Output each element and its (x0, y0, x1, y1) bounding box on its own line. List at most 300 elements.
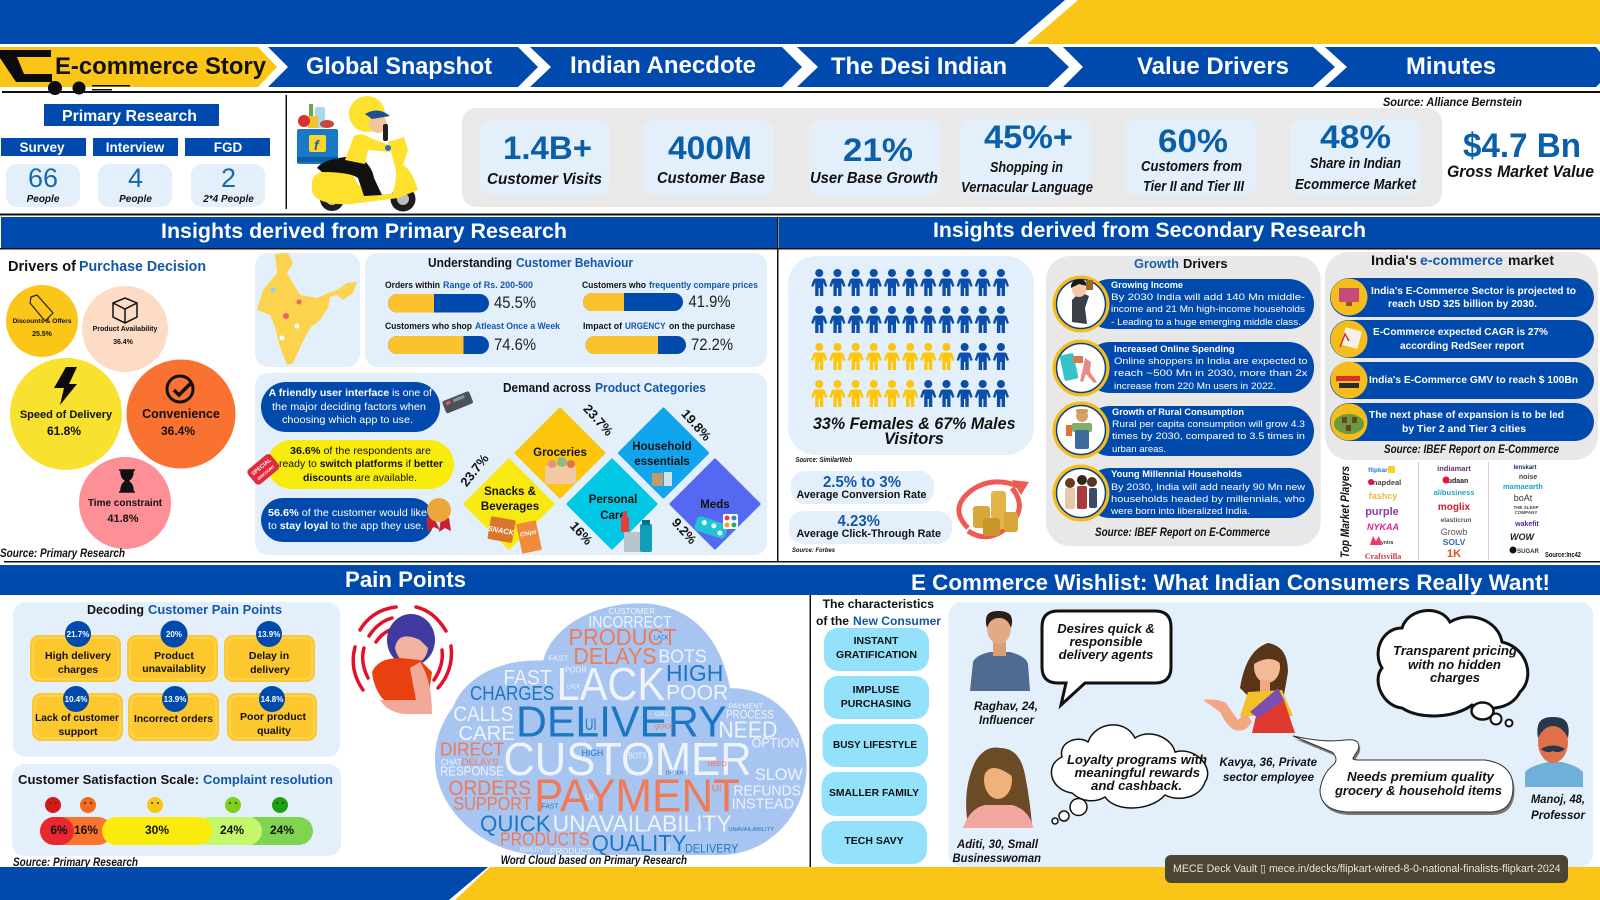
callout: switch platforms: DISCOUNT (256, 463, 276, 481)
pain: poor product quality (227, 686, 317, 741)
metric: vernacular language: Shopping in (990, 159, 1063, 176)
nav: E-commerce Story: E-commerce Story (55, 53, 267, 80)
trait: instant gratification: GRATIFICATION (836, 649, 917, 661)
stacked satisfaction bar: 16% (74, 823, 98, 837)
navigation: chevrons (0, 47, 1600, 95)
driver: millennial households: were born into liberalized India. (1110, 506, 1250, 517)
stat: FGD: FGD (214, 140, 242, 155)
trait: smaller family: SMALLER FAMILY (829, 787, 919, 799)
metric: market share: 48% (1320, 119, 1391, 155)
logos column 2: indiamart (1437, 464, 1471, 473)
logos column 2 (1434, 464, 1474, 560)
word cloud: QUICK (654, 724, 673, 730)
panel: consumer personas (948, 602, 1593, 867)
metric: customer visits: 1.4B+ (503, 130, 592, 166)
panel: growth drivers (1046, 256, 1321, 546)
bubble: convenience: 36.4% (161, 424, 195, 438)
label: top market players: Top Market Players (1340, 466, 1352, 558)
logos column 2: elasticrun (1441, 517, 1471, 524)
word cloud: RESPONSE (440, 764, 504, 779)
thought bubble: Kavya: Transparent pricing (1393, 643, 1517, 658)
callout: friendly user interface: choosing which app to use. (282, 414, 413, 426)
metric: shop once a week: 74.6% (494, 335, 536, 354)
trait: smaller family (822, 772, 927, 816)
stat: Interview: 4 (128, 163, 143, 193)
category: groceries: Groceries (533, 447, 587, 459)
heading: product categories: Demand across (503, 381, 591, 395)
trait: impluse purchasing: PURCHASING (841, 698, 911, 710)
heading: Primary Research: Primary Research (62, 108, 197, 125)
logos column 2: 1K (1447, 548, 1461, 560)
fact: USD 325 billion (1330, 278, 1594, 317)
fact: GMV: India's E-Commerce GMV to reach $ 100Bn (1369, 375, 1578, 386)
source: primary research: Source: Primary Research (0, 548, 125, 560)
thought bubble: Kavya: charges (1430, 670, 1480, 685)
category: snacks and beverages: Beverages (481, 501, 539, 513)
word cloud: QUICK (480, 811, 551, 837)
metric: orders within range (385, 280, 536, 312)
heading: customer behaviour: Understanding (428, 256, 512, 270)
fact: USD 325 billion: reach USD 325 billion by 2030. (1388, 299, 1537, 310)
driver: growing income: By 2030 India will add 140 Mn middle- (1111, 292, 1305, 303)
metric: customer base: Customer Base (657, 170, 765, 187)
driver: growing income: - Leading to a huge emerging middle class. (1111, 317, 1301, 328)
nav: Value Drivers (1063, 47, 1335, 87)
panel: India's e-commerce market (1325, 252, 1598, 460)
bottom banner (0, 867, 1600, 900)
stat: Survey: People (27, 194, 60, 205)
word cloud: NEED (707, 759, 727, 768)
caption: females and males: 33% Females & 67% Males (813, 414, 1016, 433)
nav: The Desi Indian (797, 47, 1069, 87)
nav: E-commerce Story (0, 47, 277, 87)
metric: tier II and III: Customers from (1141, 158, 1242, 175)
persona: Kavya: sector employee (1223, 770, 1314, 784)
bubble: product availability (82, 286, 168, 372)
bubble: time constraint: 41.8% (107, 513, 139, 525)
stat: click-through rate: Average Click-Through Rate (796, 528, 941, 540)
heading: e-commerce market: e-commerce (1420, 252, 1503, 268)
speech bubble: Raghav: responsible (1070, 634, 1142, 649)
stat: Survey: 66 (28, 163, 58, 193)
metric: gross market value: Gross Market Value (1447, 163, 1594, 181)
persona: Raghav: Influencer (979, 713, 1035, 727)
logos column 3: COMPANY (1515, 510, 1537, 515)
stat: Interview (93, 138, 178, 207)
metric: urgency: on the purchase (669, 321, 735, 331)
driver: millennial households (1052, 464, 1314, 522)
fact: Tier 2 and 3: by Tier 2 and Tier 3 cities (1402, 424, 1526, 435)
callout: switch platforms: 36.6% of the respondents are (290, 445, 431, 457)
stat: click-through rate (789, 511, 952, 544)
heading: pain points: Customer Pain Points (148, 603, 282, 617)
logos column 2: udaan (1448, 478, 1468, 485)
word cloud: FAST (542, 801, 559, 810)
bubble: time constraint (79, 457, 171, 549)
source: IBEF: Source: IBEF Report on E-Commerce (1095, 527, 1271, 539)
speech bubble: Manoj: grocery & household items (1334, 783, 1502, 798)
word cloud: LACK (654, 635, 668, 641)
nav: Minutes (1325, 47, 1600, 87)
heading: satisfaction scale (18, 772, 333, 787)
icon: delivery rider on scooter (297, 96, 418, 212)
metric: shop once a week: Atleast Once a Week (475, 321, 561, 331)
driver: rural consumption: Growth of Rural Consumption (1112, 407, 1244, 418)
panel: decoding customer pain points (13, 602, 340, 757)
thought bubble: Aditi: Loyalty programs with (1067, 752, 1207, 767)
word cloud: POOR (565, 664, 587, 674)
persona: Kavya: Kavya, 36, Private (1220, 755, 1317, 769)
bubble: convenience: Convenience (142, 407, 220, 421)
persona: Raghav (970, 611, 1038, 727)
word cloud: HIGH (666, 660, 723, 686)
callout: friendly user interface: A friendly user interface is one of (269, 387, 432, 399)
panel: findings and product categories (246, 373, 767, 555)
bubble: speed of delivery: 61.8% (47, 424, 81, 438)
category: personal care: Personal (589, 494, 637, 506)
logos column 3: noise (1519, 474, 1537, 481)
heading: e-commerce market: India's (1371, 252, 1417, 268)
stacked satisfaction bar: 6% (50, 823, 68, 837)
trait: busy lifestyle: BUSY LIFESTYLE (833, 739, 917, 751)
word cloud (435, 603, 807, 856)
heading: new consumer: New Consumer (853, 614, 941, 628)
stacked satisfaction bar (40, 817, 313, 845)
source: Alliance Bernstein: Source: Alliance Bernstein (1383, 95, 1522, 109)
fact: Tier 2 and 3: The next phase of expansion is to be led (1369, 410, 1564, 421)
percent labels: 19.8% (678, 406, 715, 444)
driver: online spending: increase from 220 Mn users in 2022. (1114, 381, 1276, 392)
stat: click-through rate: 4.23% (838, 513, 880, 530)
watermark (1165, 855, 1568, 883)
bubble: discounts and offers (6, 285, 78, 357)
panel: drivers of purchase decision (0, 258, 236, 560)
nav: Minutes: Minutes (1406, 53, 1496, 80)
pain: delay in delivery: Delay in (249, 650, 289, 662)
logos column 1: snapdeal (1369, 478, 1401, 487)
heading: e-commerce market (1371, 252, 1554, 268)
speech bubble: Raghav (1042, 611, 1171, 705)
word cloud: PRODUCT (550, 847, 592, 856)
metric: customer visits (479, 120, 610, 195)
heading: e-commerce market: market (1508, 252, 1554, 268)
logos column 1: NYKAA (1367, 522, 1399, 532)
persona: Manoj (1525, 717, 1586, 822)
word cloud: BOTS (658, 646, 707, 667)
pain: lack of customer support (32, 686, 123, 741)
driver: growing income: income and 21 Mn high-income households (1111, 304, 1305, 315)
pictogram row 4 (811, 380, 1009, 407)
metric: market share: Share in Indian (1310, 155, 1401, 172)
word cloud: DELIVERY (516, 698, 727, 747)
bubble: speed of delivery: Speed of Delivery (20, 409, 113, 421)
metric: tier II and III: Tier II and Tier III (1143, 178, 1245, 195)
word cloud: FAST (503, 664, 552, 689)
callout: switch platforms: discounts are available. (303, 472, 417, 484)
caption: word cloud: Word Cloud based on Primary Research (501, 855, 687, 867)
panel: understanding customer behaviour (365, 253, 767, 367)
metric: urgency: URGENCY (625, 321, 666, 331)
word cloud: LACK (557, 658, 665, 710)
metric: shop once a week (385, 321, 561, 354)
persona: Aditi: Businesswoman (952, 851, 1041, 865)
metric: user base growth: User Base Growth (810, 170, 938, 187)
fact: Tier 2 and 3 (1330, 403, 1594, 441)
logos column 3: mamaearth (1503, 482, 1543, 491)
pain: high delivery charges: charges (58, 664, 98, 676)
metric: customer base: 400M (668, 130, 752, 166)
logos column 3: boAt (1514, 493, 1533, 503)
stat: Survey: Survey (19, 140, 65, 155)
logos column 1 (1365, 466, 1401, 561)
nav: Indian Anecdote: Indian Anecdote (570, 52, 756, 79)
stat: FGD: 2 (221, 163, 236, 193)
fact: CAGR: E-Commerce expected CAGR is 27% (1373, 327, 1548, 338)
heading: Insights derived from Primary Research: Insights derived from Primary Research (161, 219, 567, 243)
speech bubble: Raghav: delivery agents (1059, 647, 1153, 662)
word cloud: CALLS (655, 712, 673, 718)
bubble: speed of delivery (10, 358, 122, 470)
persona: Kavya (1203, 643, 1317, 784)
persona: Aditi: Aditi, 30, Small (956, 837, 1039, 851)
callout: stay loyal: 56.6% of the customer would like (268, 507, 427, 519)
logos column 3: lenskart (1513, 465, 1537, 471)
trait: impluse purchasing (824, 676, 929, 719)
icon: cart (0, 50, 130, 95)
source: Inc42: Source:Inc42 (1545, 552, 1581, 559)
callout: switch platforms: SPECIAL (251, 457, 273, 477)
category: snacks and beverages: Snacks & (484, 486, 536, 498)
metric: user base growth: 21% (843, 132, 913, 168)
logos column 3: wakefit (1514, 521, 1540, 528)
icon: delivery rider on scooter: f (314, 137, 320, 153)
driver: rural consumption (1052, 402, 1314, 458)
word cloud: CUSTOMER (503, 733, 752, 785)
heading: product categories: Product Categories (595, 381, 706, 395)
word cloud: REFUNDS (733, 783, 801, 800)
word cloud: LACK (567, 683, 580, 690)
pain: delay in delivery (224, 621, 315, 682)
fact: GMV (1330, 362, 1594, 399)
heading: Insights derived from Secondary Research (779, 217, 1600, 248)
nav: Global Snapshot: Global Snapshot (306, 53, 492, 80)
word cloud: UI (585, 793, 593, 802)
callout: stay loyal: to stay loyal to the app they use. (268, 520, 424, 532)
heading: pain points: Decoding (87, 603, 144, 617)
heading: new consumer: of the (816, 614, 849, 628)
category: household essentials: Household (632, 441, 692, 453)
metric: orders within range: Range of Rs. 200-500 (443, 280, 533, 290)
pictogram row 1 (811, 269, 1009, 296)
pictogram row 3 (811, 343, 1009, 370)
pain: delay in delivery: 13.9% (258, 630, 280, 639)
source: Forbes: Source: Forbes (792, 547, 835, 554)
pain: poor product quality: 14.8% (261, 695, 283, 704)
bubble: discounts and offers: Discounts & Offers (13, 318, 72, 325)
metric: urgency (583, 321, 735, 354)
word cloud: DIRECT (440, 739, 504, 760)
word cloud: PAYMENT (728, 701, 764, 710)
stat: FGD: 2*4 People (202, 194, 254, 205)
trait: busy lifestyle (823, 724, 928, 767)
metric: compare prices: Customers who (582, 280, 646, 290)
heading: growth drivers (1134, 256, 1228, 271)
nav: The Desi Indian: The Desi Indian (831, 53, 1007, 80)
metric: tier II and III: 60% (1158, 123, 1228, 159)
metric: gross market value (1447, 127, 1594, 181)
callout: friendly user interface: the major deciding factors when (272, 401, 426, 413)
logos column 2: moglix (1438, 502, 1471, 513)
icon: stressed woman (353, 607, 451, 714)
persona: Raghav: Raghav, 24, (974, 699, 1038, 713)
logos column 1: purple (1365, 506, 1399, 518)
metric: compare prices (582, 280, 758, 311)
pain: high delivery charges: High delivery (45, 650, 111, 662)
metric: vernacular language (960, 119, 1093, 196)
percent labels: 9.2% (669, 515, 700, 547)
word cloud: CALLS (453, 701, 513, 726)
word cloud: OPTION (752, 735, 799, 751)
callout: friendly user interface (261, 382, 474, 432)
speech bubble: Manoj (1293, 736, 1514, 815)
logos column 3: SUGAR (1517, 549, 1539, 555)
word cloud: QUALITY (592, 830, 687, 856)
panel: new consumer characteristics (816, 597, 941, 864)
word cloud: SLOW (755, 765, 803, 784)
word cloud: PRODUCT (568, 624, 677, 650)
word cloud: QUALITY (520, 848, 544, 854)
metric: market share: Ecommerce Market (1295, 176, 1417, 193)
word cloud: CARE (458, 723, 515, 745)
word cloud: INCORRECT (588, 612, 672, 631)
trait: instant gratification (824, 628, 929, 671)
source: SimilarWeb: Source: SimilarWeb (796, 457, 853, 464)
stat: FGD (185, 138, 270, 207)
word cloud: CUSTOMER (608, 606, 655, 616)
pain: incorrect orders: Incorrect orders (134, 713, 213, 725)
stat: Survey (1, 138, 86, 207)
fact: USD 325 billion: India's E-Commerce Sector is projected to (1371, 286, 1576, 297)
thought bubble: Kavya (1378, 611, 1528, 726)
caption: females and males: Visitors (884, 429, 944, 448)
source: primary research: Source: Primary Research (13, 857, 138, 869)
category: snacks and beverages: SNACK (487, 524, 515, 537)
bubble: product availability: Product Availability (93, 326, 158, 333)
driver: millennial households: Young Millennial Households (1111, 469, 1242, 480)
stacked satisfaction bar: 24% (270, 823, 294, 837)
panel: primary research summary (1, 104, 270, 207)
stat: Interview: Interview (106, 140, 165, 155)
trait: instant gratification: INSTANT (854, 635, 899, 647)
panel: customer satisfaction scale (12, 764, 341, 856)
watermark: MECE Deck Vault ▯ mece.in/decks/flipkart-wired-8-0-national-finalists-flipkart-2024 (1173, 863, 1561, 875)
heading band: Pain Points and Wishlist (0, 565, 1600, 595)
percent labels: 23.7% (580, 401, 617, 439)
pain: product unavailability (127, 620, 218, 682)
logos column 3: WOW (1510, 532, 1535, 542)
heading: pain points (87, 603, 282, 617)
metric: compare prices: frequently compare prices (649, 280, 758, 290)
heading: Insights derived from Secondary Research: Insights derived from Secondary Research (933, 218, 1366, 242)
driver: online spending: Increased Online Spending (1114, 344, 1235, 355)
driver: online spending: Online shoppers in India are expected to (1114, 356, 1308, 367)
driver: rural consumption: times by 2030, compared to 3.5 times in (1112, 431, 1305, 442)
word cloud: ORDERS (448, 775, 531, 800)
logos column 3 (1503, 465, 1543, 555)
metric: customer base (643, 120, 774, 195)
driver: millennial households: households headed by millennials, who (1111, 494, 1305, 505)
heading: drivers (8, 258, 206, 275)
pain: lack of customer support: 10.4% (65, 695, 87, 704)
metric: user base growth (809, 120, 940, 196)
nav: Global Snapshot (268, 47, 538, 87)
stat: conversion rate (791, 471, 934, 504)
source: IBEF report: Source: IBEF Report on E-Commerce (1384, 444, 1560, 456)
word cloud: INSTEAD (732, 795, 794, 812)
callout: switch platforms: ready to switch platforms if better (279, 458, 443, 470)
metric: shop once a week: Customers who shop (385, 321, 472, 331)
persona: Manoj: Manoj, 48, (1531, 792, 1585, 806)
metric: vernacular language: 45%+ (984, 119, 1073, 155)
word cloud: FAST (548, 654, 569, 663)
speech bubble: Raghav: Desires quick & (1057, 621, 1155, 636)
heading: new consumer: The characteristics (823, 597, 934, 611)
word cloud: NEED (718, 716, 777, 742)
word cloud: POOR (666, 679, 728, 704)
category: personal care (568, 460, 656, 552)
heading: Insights derived from Primary Research (1, 217, 777, 248)
nav: Indian Anecdote (530, 47, 802, 87)
logos column 3: THE SLEEP (1513, 505, 1539, 510)
word cloud: UI (712, 784, 722, 795)
word cloud: SUPPORT (453, 793, 532, 814)
heading: growth drivers: Drivers (1183, 256, 1228, 271)
word cloud: HIGH (582, 748, 603, 758)
word cloud: UNAVAILABILITY (553, 811, 732, 837)
heading: customer behaviour: Customer Behaviour (516, 256, 633, 270)
percent labels: 16% (567, 518, 596, 548)
caption: females and males (813, 414, 1016, 448)
category: household essentials: essentials (634, 456, 690, 468)
pictogram row 2 (811, 306, 1009, 333)
metric: urgency: 72.2% (691, 335, 733, 354)
heading: E Commerce Wishlist: E Commerce Wishlist: What Indian Consumers Really Want! (911, 570, 1550, 595)
word cloud: PAYMENT (534, 770, 740, 822)
trait: tech savy (822, 821, 927, 864)
top banner (0, 0, 1600, 44)
metric: customer visits: Customer Visits (487, 171, 602, 188)
thought bubble: Kavya: with no hidden (1408, 657, 1501, 672)
word cloud: UI (665, 844, 670, 855)
bubble: time constraint: Time constraint (88, 498, 163, 509)
trait: impluse purchasing: IMPLUSE (853, 684, 899, 696)
pain: high delivery charges (30, 621, 121, 682)
metric: vernacular language: Vernacular Language (961, 179, 1093, 196)
logos column 1: Craftsvilla (1365, 552, 1401, 561)
pain: product unavailability: Product (154, 650, 194, 662)
percent labels (457, 401, 715, 548)
persona: Manoj: Professor (1531, 808, 1586, 822)
word cloud: UNAVAILABILITY (728, 827, 774, 833)
callout: switch platforms (246, 440, 454, 489)
stat: conversion rate: Average Conversion Rate (796, 489, 926, 501)
percent labels: 23.7% (457, 451, 492, 489)
metric: gross market value: $4.7 Bn (1463, 127, 1581, 165)
word cloud: ORDERS (666, 770, 687, 776)
category: groceries (516, 409, 604, 497)
word cloud: CHAT (441, 757, 462, 767)
logos column 2: Growb (1441, 527, 1467, 537)
